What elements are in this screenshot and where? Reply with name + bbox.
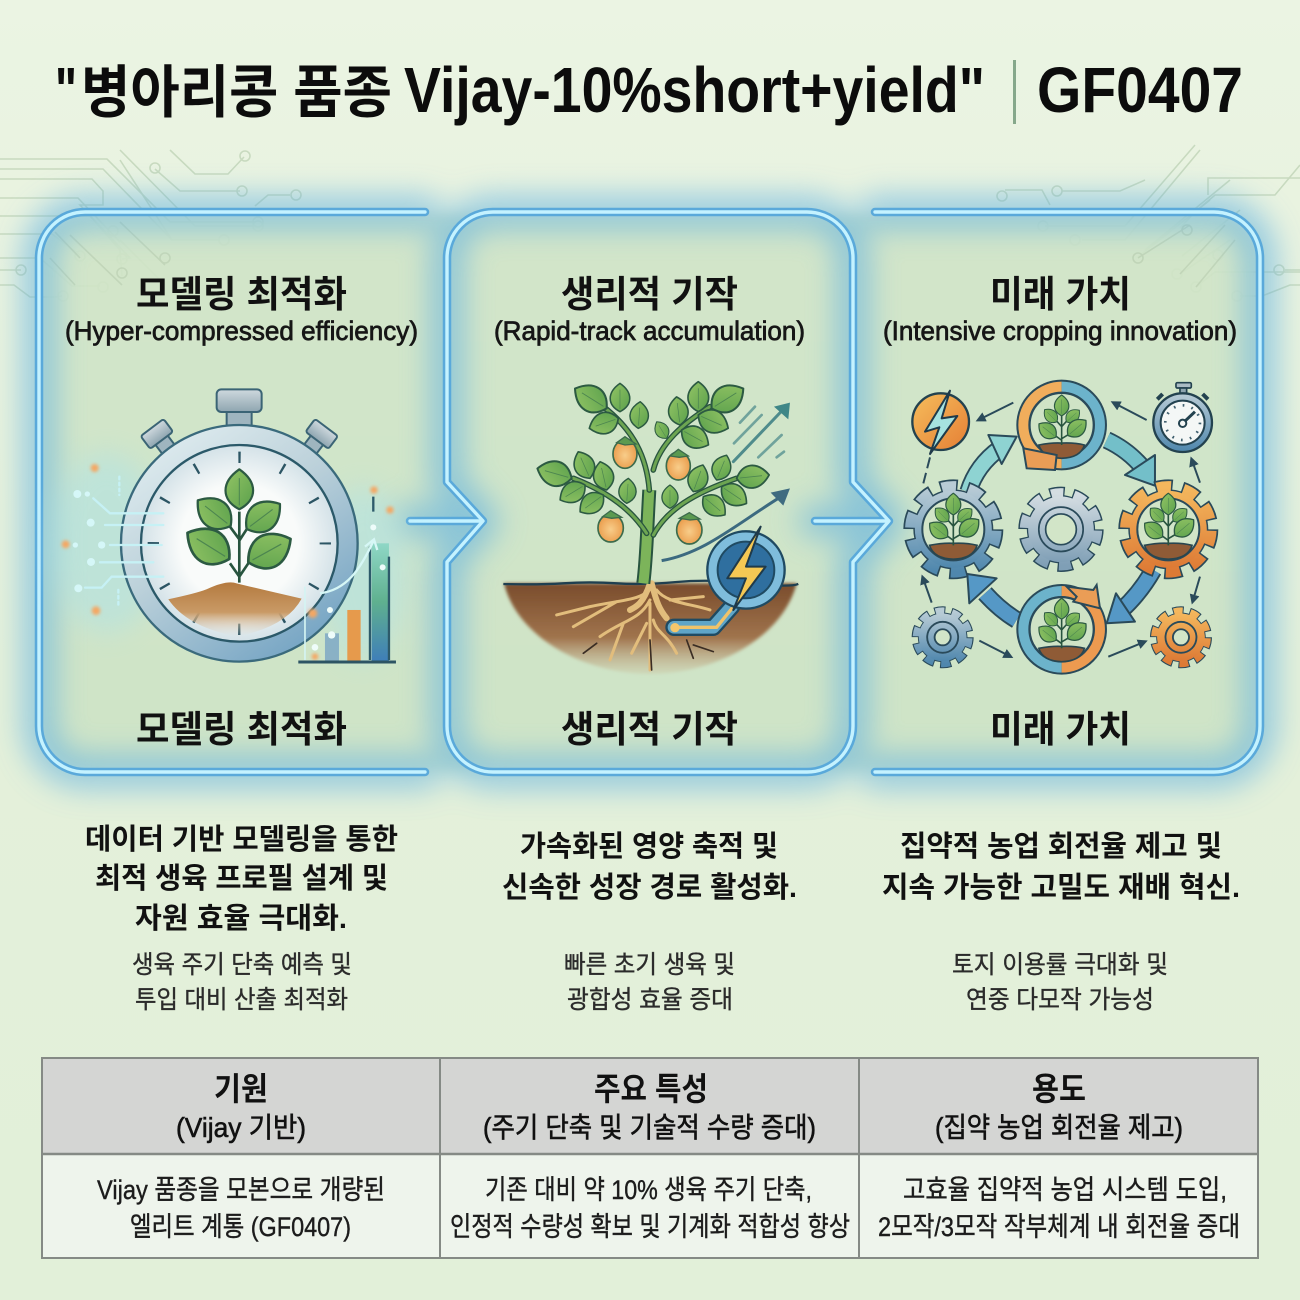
panel bottom label: modeling: 모델링 최적화 [136, 709, 347, 750]
text block: modeling description: 데이터 기반 모델링을 통한 [85, 823, 398, 856]
panel: modeling optimization text: 모델링 최적화 [136, 274, 347, 315]
title [55, 54, 1243, 126]
icon: small blue gear [917, 611, 969, 663]
panel: future value text [883, 274, 1237, 346]
table column: key traits: 주요 특성 [594, 1071, 708, 1107]
table column: key traits [450, 1071, 850, 1242]
text block: physiological description: 빠른 초기 생육 및 [564, 951, 735, 979]
text block: physiological description: 가속화된 영양 축적 및 [520, 830, 778, 863]
title: GF0407 [1037, 54, 1243, 126]
text block: future value description: 토지 이용률 극대화 및 [952, 951, 1168, 979]
table column: origin: Vijay 품종을 모본으로 개량된 [97, 1175, 385, 1205]
panel bottom label: physiological: 생리적 기작 [561, 709, 738, 750]
text block: physiological description: 광합성 효율 증대 [567, 986, 733, 1014]
neon panel frames [39, 212, 1260, 772]
icon: bolt circle [912, 391, 969, 454]
title: " [55, 54, 77, 126]
icon: small arrows [923, 403, 1200, 657]
text block: future value description: 지속 가능한 고밀도 재배 혁신. [882, 871, 1240, 904]
text block: modeling description [85, 823, 398, 1014]
table column: use: 고효율 집약적 농업 시스템 도입, [903, 1175, 1227, 1205]
text block: physiological description [502, 830, 797, 1014]
table column: origin [97, 1071, 385, 1242]
text block: modeling description: 생육 주기 단축 예측 및 [132, 951, 352, 979]
icon: stopwatch with plant and chart [50, 389, 407, 662]
table column: origin: 기원 [214, 1071, 268, 1107]
title: 병아리콩 품종 [81, 61, 392, 125]
icon: bottom ring with sprout [1016, 584, 1107, 675]
text block: modeling description: 최적 생육 프로필 설계 및 [95, 862, 388, 895]
text block: future value description: 집약적 농업 회전율 제고 및 [900, 830, 1222, 863]
text block: physiological description: 신속한 성장 경로 활성화. [502, 871, 797, 904]
icon: chickpea plant with roots and energy [503, 378, 798, 674]
panel: physiological mechanism text: (Rapid-track accumulation) [494, 316, 805, 346]
table column: use: (집약 농업 회전율 제고) [935, 1112, 1183, 1143]
table column: key traits: 인정적 수량성 확보 및 기계화 적합성 향상 [450, 1212, 850, 1242]
icon: mini stopwatch [1153, 383, 1212, 452]
panel: physiological mechanism text [494, 274, 805, 346]
icon: big cycle arrows [967, 435, 1155, 623]
table column: origin: 엘리트 계통 (GF0407) [130, 1212, 351, 1242]
circuit pattern background [0, 145, 1300, 301]
table column: key traits: (주기 단축 및 기술적 수량 증대) [483, 1112, 816, 1143]
panel bottom label: future value: 미래 가치 [990, 709, 1131, 750]
panel: future value text: (Intensive cropping innovation) [883, 316, 1237, 346]
table column: use: 2모작/3모작 작부체계 내 회전율 증대 [878, 1212, 1240, 1242]
text block: future value description: 연중 다모작 가능성 [966, 986, 1154, 1014]
text block: modeling description: 자원 효율 극대화. [135, 902, 347, 935]
title: Vijay-10%short+yield" [404, 54, 985, 126]
icon: right gear with sprout [1126, 487, 1210, 571]
text block: modeling description: 투입 대비 산출 최적화 [135, 986, 348, 1014]
icon: left gear with sprout [911, 487, 995, 571]
icon: small orange gear [1155, 611, 1207, 663]
panel: physiological mechanism text: 생리적 기작 [561, 274, 738, 315]
table column: key traits: 기존 대비 약 10% 생육 주기 단축, [485, 1175, 812, 1205]
summary table [42, 1058, 1258, 1258]
table column: use [878, 1071, 1240, 1242]
panel: modeling optimization text: (Hyper-compressed efficiency) [65, 316, 418, 346]
table column: origin: (Vijay 기반) [176, 1112, 306, 1143]
panel: modeling optimization text [65, 274, 418, 346]
panel: future value text: 미래 가치 [990, 274, 1131, 315]
icon: center gear [1025, 493, 1097, 565]
icon: top ring with sprout [1016, 380, 1107, 470]
text block: future value description [882, 830, 1240, 1014]
icon: crop cycle with gears [911, 380, 1212, 675]
table column: use: 용도 [1032, 1071, 1086, 1107]
